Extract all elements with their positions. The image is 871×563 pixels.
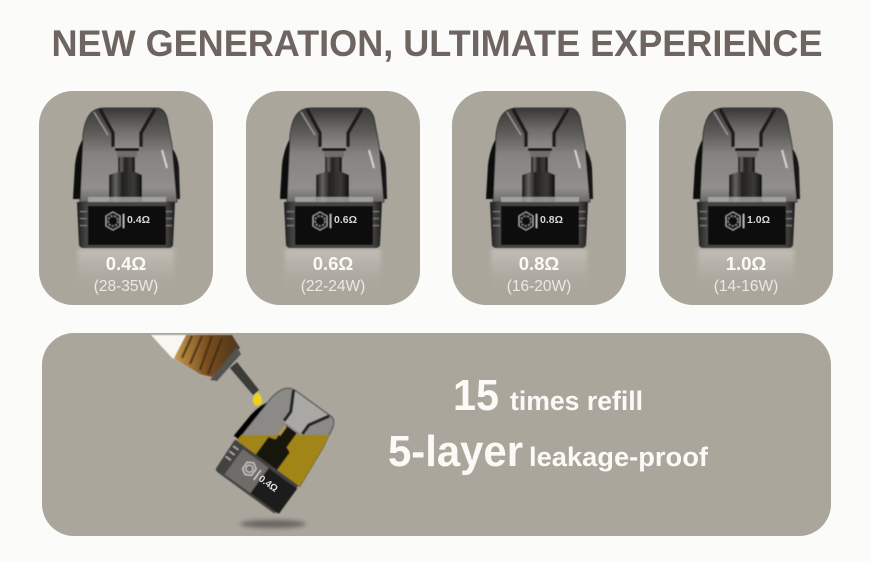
text: 5-layer leakage-proof xyxy=(388,427,709,476)
text: 5-layer leakage-proof: 5-layer xyxy=(388,427,523,476)
panel: refill and leakage-proof xyxy=(42,333,831,536)
wattage: 28-35W: (28-35W) xyxy=(94,278,158,295)
icon: 1.0 ohm pod xyxy=(693,108,800,248)
resistance: 0.6 ohm: 0.6Ω xyxy=(313,253,353,274)
pod label: 1.0 ohm: 1.0Ω xyxy=(747,214,770,226)
pod label: 0.6 ohm: 0.6Ω xyxy=(334,214,357,226)
wattage: 22-24W: (22-24W) xyxy=(301,278,365,295)
tilted pod label: 0.4Ω xyxy=(256,473,280,495)
resistance: 1.0 ohm: 1.0Ω xyxy=(726,253,766,274)
text: 15 times refill: 15 xyxy=(453,371,499,420)
pod base xyxy=(213,439,298,515)
funnel xyxy=(275,390,329,441)
glass shell xyxy=(237,380,344,487)
text: 5-layer leakage-proof: leakage-proof xyxy=(529,442,709,472)
e-liquid fill xyxy=(237,393,335,487)
pod shadow xyxy=(240,520,306,528)
panel: 0.6 ohm pod xyxy=(246,91,420,305)
wattage: 14-16W: (14-16W) xyxy=(714,278,778,295)
centre column xyxy=(256,421,302,470)
resistance: 0.4 ohm: 0.4Ω xyxy=(106,253,146,274)
resistance: 0.8 ohm: 0.8Ω xyxy=(519,253,559,274)
icon: e-liquid bottle xyxy=(151,335,262,406)
text: 15 times refill xyxy=(453,371,643,420)
panel: 0.8 ohm pod xyxy=(452,91,626,305)
pod wing xyxy=(234,396,273,443)
panel: 0.4 ohm pod xyxy=(39,91,213,305)
icon: yellow drop xyxy=(253,392,262,406)
icon: tilted pod with e-liquid xyxy=(211,377,344,516)
pod label: 0.4 ohm: 0.4Ω xyxy=(127,214,150,226)
pod label: 0.8 ohm: 0.8Ω xyxy=(540,214,563,226)
icon: 0.6 ohm pod xyxy=(280,108,387,248)
wattage: 16-20W: (16-20W) xyxy=(507,278,571,295)
panel: 1.0 ohm pod xyxy=(659,91,833,305)
icon: 0.8 ohm pod xyxy=(486,108,593,248)
title: NEW GENERATION, ULTIMATE EXPERIENCE xyxy=(52,22,822,64)
icon: 0.4 ohm pod xyxy=(73,108,180,248)
text: 15 times refill: times refill xyxy=(510,386,643,416)
